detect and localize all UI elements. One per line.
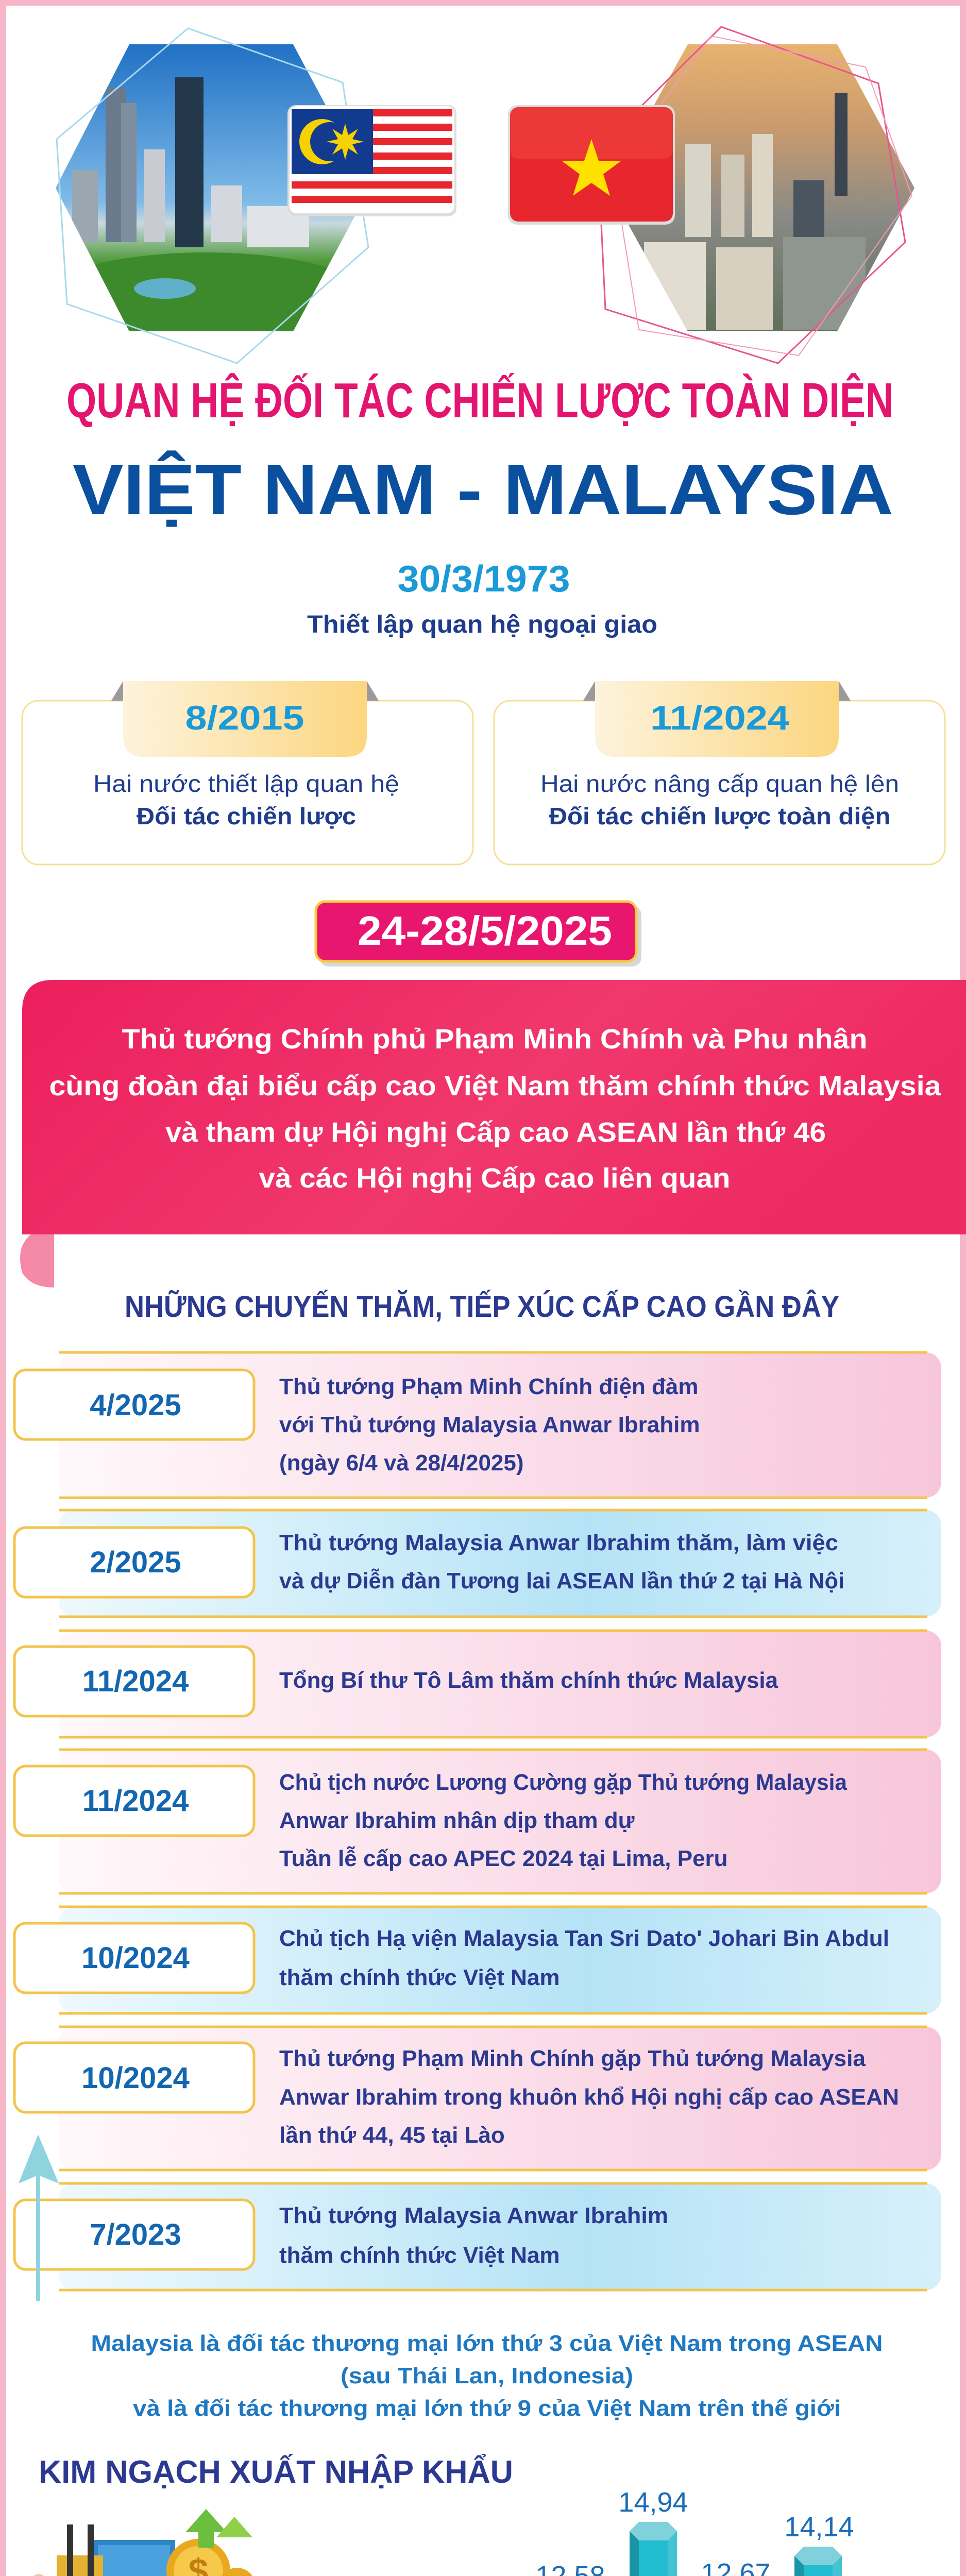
card: 8/2015: Hai nước thiết lập quan hệ (93, 770, 399, 797)
date: 30/3/1973: 30/3/1973 (398, 558, 570, 600)
timeline row: 10/2024 Pham Minh Chinh: Thủ tướng Phạm Minh Chính gặp Thủ tướng Malaysia (279, 2046, 866, 2071)
text: trade partner: (sau Thái Lan, Indonesia) (341, 2363, 633, 2388)
flag: Malaysia (287, 105, 456, 216)
timeline row: 7/2023: thăm chính thức Việt Nam (279, 2243, 560, 2268)
timeline row: 4/2025: với Thủ tướng Malaysia Anwar Ibrahim (279, 1412, 700, 1437)
flag: Vietnam (508, 105, 675, 225)
timeline row: 10/2024 Johari (14, 1907, 941, 2013)
timeline row: 11/2024 To Lam: 11/2024 (82, 1665, 189, 1698)
timeline row: 7/2023 (14, 2183, 941, 2290)
bar chart: trade turnover: 14,94 (618, 2487, 688, 2518)
timeline row: 11/2024 To Lam: Tổng Bí thư Tô Lâm thăm chính thức Malaysia (279, 1668, 778, 1693)
arrow: timeline direction (19, 2134, 59, 2301)
timeline row: 10/2024 Pham Minh Chinh: Anwar Ibrahim trong khuôn khổ Hội nghị cấp cao ASEAN (279, 2084, 899, 2110)
title: Viet Nam - Malaysia: VIỆT NAM - MALAYSIA (73, 450, 893, 530)
timeline row: 2/2025: Thủ tướng Malaysia Anwar Ibrahim thăm, làm việc (279, 1530, 838, 1555)
timeline row: 2/2025: 2/2025 (90, 1546, 181, 1579)
photo: Kuala Lumpur hexagon (41, 28, 376, 363)
timeline row: 2/2025: và dự Diễn đàn Tương lai ASEAN lần thứ 2 tại Hà Nội (279, 1568, 844, 1594)
text: trade partner: Malaysia là đối tác thương mại lớn thứ 3 của Việt Nam trong ASEAN (91, 2331, 883, 2356)
timeline row: 11/2024 Luong Cuong: Chủ tịch nước Lương Cường gặp Thủ tướng Malaysia (279, 1770, 847, 1795)
timeline row: 11/2024 To Lam (14, 1631, 941, 1737)
timeline row: 11/2024 Luong Cuong (14, 1750, 941, 1893)
bar chart: trade turnover (42, 2487, 947, 2576)
timeline row: 10/2024 Johari: thăm chính thức Việt Nam (279, 1965, 560, 1990)
timeline row: 7/2023: Thủ tướng Malaysia Anwar Ibrahim (279, 2203, 668, 2228)
icon: trade forklift and coins (31, 2509, 256, 2576)
banner: official visit (20, 980, 966, 1287)
timeline row: 2/2025 (14, 1510, 941, 1617)
banner: official visit: cùng đoàn đại biểu cấp cao Việt Nam thăm chính thức Malaysia (49, 1071, 942, 1101)
card: 8/2015: Đối tác chiến lược (137, 803, 356, 829)
text: trade partner: và là đối tác thương mại lớn thứ 9 của Việt Nam trên thế giới (133, 2396, 841, 2421)
heading: trade turnover: KIM NGẠCH XUẤT NHẬP KHẨU (39, 2454, 513, 2490)
timeline row: 10/2024 Pham Minh Chinh: 10/2024 (81, 2061, 190, 2095)
card: 11/2024 (494, 681, 945, 865)
timeline row: 7/2023: 7/2023 (90, 2218, 181, 2251)
timeline row: 11/2024 Luong Cuong: Tuần lễ cấp cao APEC 2024 tại Lima, Peru (279, 1845, 728, 1871)
banner: official visit: và tham dự Hội nghị Cấp cao ASEAN lần thứ 46 (165, 1117, 826, 1148)
timeline row: 4/2025: 4/2025 (90, 1388, 181, 1422)
card: 11/2024: Đối tác chiến lược toàn diện (549, 803, 890, 829)
date box: 24-28/5/2025 (316, 902, 641, 967)
card: 11/2024: Hai nước nâng cấp quan hệ lên (540, 770, 899, 797)
card: 8/2015: 8/2015 (185, 699, 304, 737)
timeline row: 4/2025: Thủ tướng Phạm Minh Chính điện đàm (279, 1374, 699, 1399)
timeline row: 4/2025 (14, 1352, 941, 1498)
banner: official visit: Thủ tướng Chính phủ Phạm Minh Chính và Phu nhân (122, 1024, 868, 1055)
card: 8/2015 (22, 681, 473, 865)
bar chart: trade turnover: 14,14 (784, 2512, 854, 2543)
photo: Hanoi hexagon (598, 27, 922, 363)
timeline row: 10/2024 Johari: 10/2024 (81, 1941, 190, 1975)
timeline row: 11/2024 Luong Cuong: Anwar Ibrahim nhân dịp tham dự (279, 1808, 635, 1833)
banner: official visit: và các Hội nghị Cấp cao liên quan (259, 1163, 731, 1194)
timeline row: 10/2024 Johari: Chủ tịch Hạ viện Malaysia Tan Sri Dato' Johari Bin Abdul (279, 1926, 889, 1951)
timeline row: 4/2025: (ngày 6/4 và 28/4/2025) (279, 1450, 524, 1476)
timeline row: 10/2024 Pham Minh Chinh (14, 2027, 941, 2170)
timeline row: 11/2024 Luong Cuong: 11/2024 (82, 1784, 189, 1818)
date: 30/3/1973 (307, 558, 657, 638)
date box: 24-28/5/2025: 24-28/5/2025 (358, 908, 612, 954)
heading: recent visits: NHỮNG CHUYẾN THĂM, TIẾP XÚC CẤP CAO GẦN ĐÂY (125, 1290, 839, 1324)
text: trade partner (91, 2331, 883, 2421)
timeline row: 10/2024 Pham Minh Chinh: lần thứ 44, 45 tại Lào (279, 2123, 505, 2148)
card: 11/2024: 11/2024 (650, 699, 789, 737)
date: 30/3/1973: Thiết lập quan hệ ngoại giao (307, 611, 657, 638)
